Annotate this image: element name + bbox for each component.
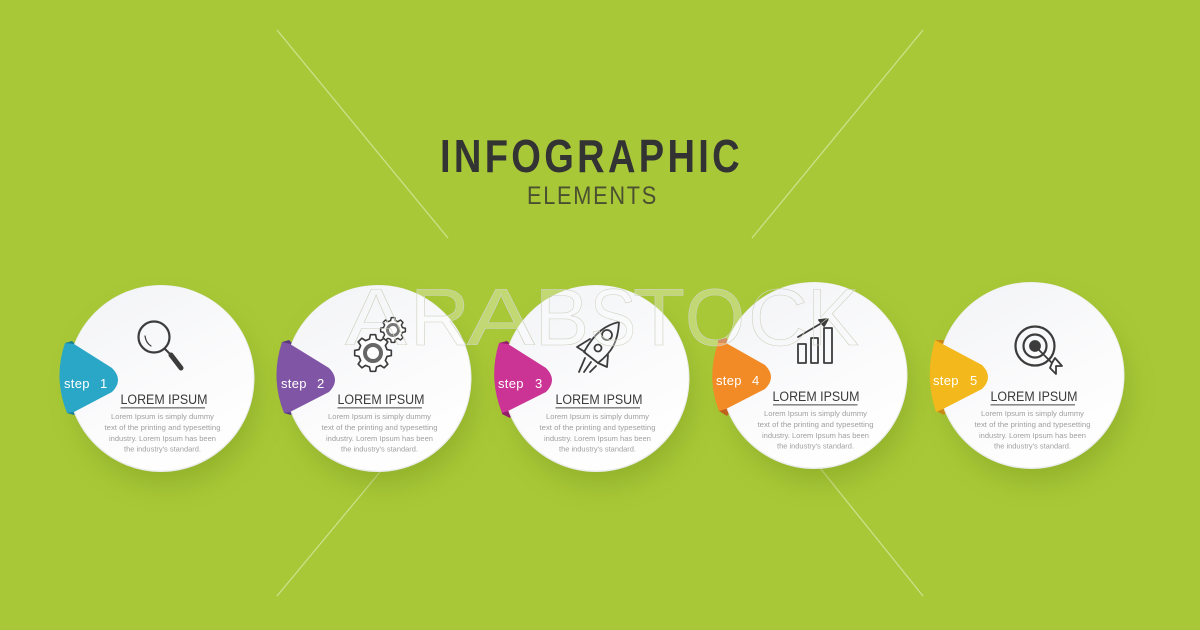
step tab 1 xyxy=(59,343,118,413)
body text 4: the industry's standard. xyxy=(777,442,854,450)
body text 1 xyxy=(104,412,220,454)
step tab 5 xyxy=(930,340,988,412)
watermark: T xyxy=(633,273,685,363)
panel: step 4 xyxy=(712,282,910,481)
heading 1: LOREM IPSUM xyxy=(120,392,208,407)
body text 5 xyxy=(974,409,1090,450)
step tab 5: 5 xyxy=(970,373,978,388)
step tab 2: 2 xyxy=(317,376,325,391)
subtitle: ELEMENTS xyxy=(527,182,658,210)
body text 4 xyxy=(758,409,874,450)
watermark: S xyxy=(590,273,636,363)
icon: target with arrow xyxy=(1016,326,1062,374)
heading 2: LOREM IPSUM xyxy=(338,392,424,407)
heading 4: LOREM IPSUM xyxy=(772,389,860,404)
step tab 4: 4 xyxy=(752,373,760,388)
watermark: R xyxy=(410,273,470,363)
watermark: B xyxy=(535,273,589,363)
body text 3: industry. Lorem Ipsum has been xyxy=(544,434,651,443)
body text 3: the industry's standard. xyxy=(559,444,636,454)
body text 2: industry. Lorem Ipsum has been xyxy=(326,434,433,443)
body text 4: text of the printing and typesetting xyxy=(758,420,874,429)
step tab 3: 3 xyxy=(535,376,543,391)
body text 5: the industry's standard. xyxy=(994,442,1071,450)
body text 4: industry. Lorem Ipsum has been xyxy=(762,431,869,440)
body text 2: text of the printing and typesetting xyxy=(322,423,438,432)
body text 1: text of the printing and typesetting xyxy=(104,423,220,432)
step tab 2: step xyxy=(281,376,307,391)
step tab 3: step xyxy=(498,376,524,391)
panel: step 5 xyxy=(930,282,1127,481)
body text 5: Lorem Ipsum is simply dummy xyxy=(981,409,1084,418)
body text 2: Lorem Ipsum is simply dummy xyxy=(328,412,431,421)
body text 3 xyxy=(540,412,656,454)
step tab 1: step xyxy=(64,376,90,391)
icon: gears xyxy=(355,318,405,371)
body text 4: Lorem Ipsum is simply dummy xyxy=(764,409,867,418)
icon: rocket xyxy=(577,322,619,372)
title: INFOGRAPHIC xyxy=(440,130,743,182)
icon: bar chart with arrow xyxy=(798,319,832,363)
body text 1: the industry's standard. xyxy=(124,444,201,454)
heading 5: LOREM IPSUM xyxy=(990,389,1078,404)
step tab 4: step xyxy=(716,373,742,388)
watermark xyxy=(345,273,859,363)
body text 3: text of the printing and typesetting xyxy=(540,423,656,432)
panel: step 3 xyxy=(494,285,692,484)
body text 2: the industry's standard. xyxy=(341,444,418,454)
watermark: C xyxy=(748,273,808,363)
step tab 3 xyxy=(494,343,552,413)
step tab 4 xyxy=(712,343,771,411)
watermark: A xyxy=(467,273,535,363)
step tab 2 xyxy=(276,342,335,413)
body text 1: Lorem Ipsum is simply dummy xyxy=(111,412,214,421)
panel: step 1 xyxy=(59,285,257,484)
body text 5: industry. Lorem Ipsum has been xyxy=(979,431,1086,440)
icon: magnifier xyxy=(138,322,181,368)
heading 3: LOREM IPSUM xyxy=(556,392,642,407)
watermark: A xyxy=(345,273,407,363)
body text 1: industry. Lorem Ipsum has been xyxy=(109,434,216,443)
panel: step 2 xyxy=(276,285,474,484)
body text 2 xyxy=(322,412,438,454)
watermark: K xyxy=(807,273,859,363)
step tab 1: 1 xyxy=(100,376,108,391)
watermark: O xyxy=(685,273,745,363)
body text 5: text of the printing and typesetting xyxy=(974,420,1090,429)
body text 3: Lorem Ipsum is simply dummy xyxy=(546,412,649,421)
step tab 5: step xyxy=(933,373,959,388)
